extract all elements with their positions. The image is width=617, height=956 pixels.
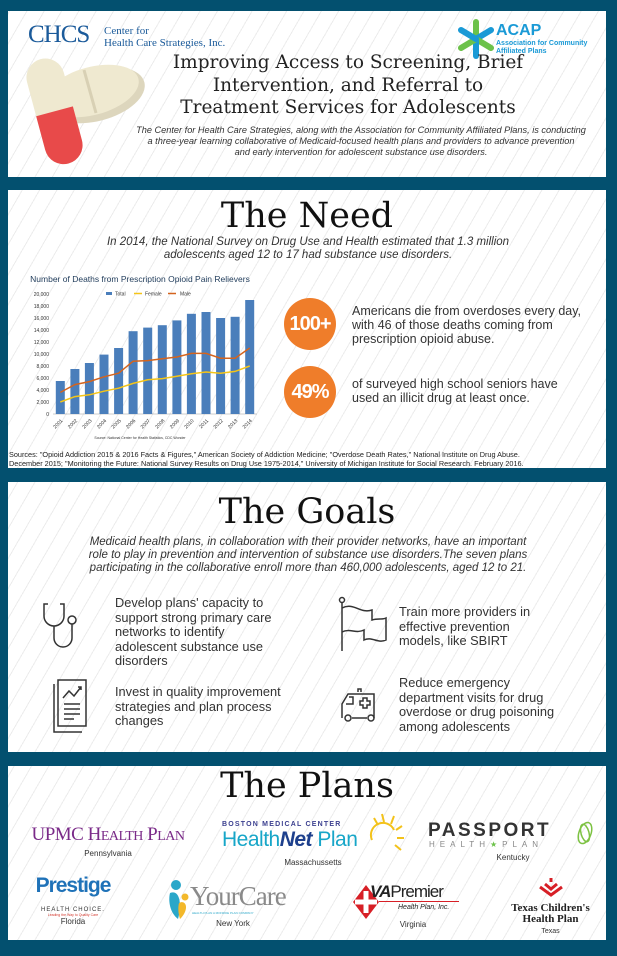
logo: UPMC: UPMC HEALTH PLAN: [31, 824, 185, 845]
goal: stethoscope: adolescent substance use: [115, 638, 263, 654]
icon: orange circle 49%: 49%: [291, 381, 329, 403]
goal: flag: [338, 596, 530, 651]
bar chart: opioid deaths: 16,000: [34, 316, 49, 322]
logo: ACAP: Affiliated Plans: [496, 48, 547, 55]
goal: flag: models, like SBIRT: [399, 633, 508, 648]
stat: 100+: Americans die from overdoses every day,: [352, 304, 581, 318]
bar chart: opioid deaths: Number of Deaths from Prescription Opioid Pain Relievers: [30, 274, 250, 284]
bar chart: opioid deaths: 18,000: [34, 304, 49, 310]
bar chart: opioid deaths: Total: [115, 292, 126, 298]
text: goals intro: role to play in prevention and intervention of substance use disorders.The seven plans: [89, 549, 527, 561]
goal: report: strategies and plan process: [115, 698, 272, 714]
icon: flag: [338, 596, 387, 651]
logo: YourCare: [169, 880, 286, 928]
logo: CHCS: [28, 21, 225, 49]
logo: Prestige Health Choice: Leading the Way to Quality Care: [48, 913, 98, 917]
goal: ambulance: overdose or drug poisoning: [399, 704, 554, 719]
sources: Sources: "Opioid Addiction 2015 & 2016 Facts & Figures," American Society of Addiction Medicine; "Overdose Death Rates," National Institute on Drug Abuse.: [9, 450, 520, 459]
bar chart: opioid deaths: 14,000: [34, 328, 49, 334]
intro text: [136, 125, 586, 157]
logo: Prestige Health Choice: Prestige: [36, 874, 110, 897]
bar chart: opioid deaths: 2001: [52, 418, 65, 430]
icon: orange circle 100+: 100+: [289, 313, 331, 335]
logo: CHCS: Center for: [104, 25, 149, 37]
sources: December 2015; "Monitoring the Future: National Survey Results on Drug Use 1975-2014," University of Michigan Institute for Social Research. February 2016.: [9, 458, 524, 468]
logo: ACAP: Association for Community: [496, 40, 587, 47]
goal: report: [53, 679, 281, 733]
logo: VA Premier: Virginia: [400, 920, 426, 929]
bar chart: opioid deaths: [30, 274, 257, 440]
bar chart: opioid deaths: 2013: [227, 418, 239, 430]
bar chart: opioid deaths: 0: [46, 412, 49, 418]
goal: ambulance: Reduce emergency: [399, 675, 510, 690]
logo: Texas Children's Health Plan: Texas: [541, 928, 560, 935]
icon: orange circle 100+: [284, 298, 336, 350]
bar chart: opioid deaths: 2011: [198, 418, 210, 430]
bar chart: opioid deaths: 2003: [81, 418, 94, 430]
logo: UPMC: Pennsylvania: [84, 849, 132, 858]
logo: UPMC: [31, 824, 185, 858]
logo: ACAP: ACAP: [496, 22, 541, 39]
bar chart: opioid deaths: Male: [180, 292, 191, 298]
logo: Boston Medical Center HealthNet Plan: HealthNet Plan: [222, 828, 357, 851]
goal: stethoscope: support strong primary care: [115, 610, 271, 624]
heading: The Goals: The Goals: [219, 492, 395, 532]
goal: ambulance: among adolescents: [399, 718, 510, 734]
logo: Texas Children's Health Plan: [511, 878, 590, 935]
goal: stethoscope: [43, 595, 271, 668]
goal: stethoscope: Develop plans' capacity to: [115, 595, 263, 610]
stat: 100+: with 46 of those deaths coming from: [352, 318, 553, 332]
logo: YourCare: New York: [216, 919, 250, 928]
bar chart: opioid deaths: 2004: [96, 418, 108, 430]
logo: Passport Health Plan: Kentucky: [497, 853, 529, 862]
logo: ACAP: [458, 19, 588, 59]
panel: the plans: [8, 766, 606, 940]
logo: Prestige Health Choice: Florida: [61, 917, 85, 926]
stat: 100+: [284, 298, 581, 350]
heading: The Plans: The Plans: [220, 766, 394, 806]
logo: CHCS: CHCS: [28, 21, 89, 48]
bar chart: opioid deaths: Female: [145, 292, 162, 298]
logo: Passport Health Plan: [428, 820, 593, 862]
stat: 100+: prescription opioid abuse.: [352, 332, 494, 346]
icon: orange circle 49%: [284, 366, 336, 418]
logo: Boston Medical Center HealthNet Plan: [222, 814, 404, 867]
logo: Passport Health Plan: HEALTH★PLAN: [429, 840, 543, 849]
stat: 49%: [284, 366, 558, 418]
goal: ambulance: department visits for drug: [399, 690, 543, 704]
logo: Boston Medical Center HealthNet Plan: Massachussetts: [284, 858, 342, 867]
bar chart: opioid deaths: 4,000: [36, 388, 49, 394]
logo: VA Premier: VAPremier: [370, 882, 443, 901]
bar chart: opioid deaths: 2008: [154, 418, 167, 430]
text: goals intro: participating in the collaborative enroll more than 460,000 adolescents, aged 12 to 21.: [90, 562, 526, 574]
text: goals intro: [89, 536, 527, 574]
logo: VA Premier: Health Plan, Inc.: [398, 904, 449, 911]
bar chart: opioid deaths: 2010: [183, 418, 196, 430]
logo: Prestige Health Choice: [36, 874, 111, 926]
intro text: and early intervention for adolescent substance use disorders.: [235, 147, 487, 157]
bar chart: opioid deaths: 2007: [140, 418, 152, 430]
bar chart: opioid deaths: 2009: [169, 418, 181, 430]
stat: 49%: of surveyed high school seniors have: [352, 377, 558, 391]
logo: Texas Children's Health Plan: Texas Children's: [511, 902, 590, 914]
goal: stethoscope: disorders: [115, 653, 168, 668]
title: Treatment Services for Adolescents: [180, 97, 516, 118]
bar chart: opioid deaths: 2012: [213, 418, 225, 430]
text: survey: In 2014, the National Survey on Drug Use and Health estimated that 1.3 million: [107, 236, 509, 248]
bar chart: opioid deaths: 2014: [242, 418, 254, 430]
logo: YourCare: HEALTH PLAN A MONROE PLAN COMPANY: [192, 911, 254, 915]
panel: header: [8, 11, 606, 177]
goal: flag: Train more providers in: [399, 604, 530, 619]
logo: Boston Medical Center HealthNet Plan: BOSTON MEDICAL CENTER: [222, 821, 341, 828]
bar chart: opioid deaths: 12,000: [34, 340, 49, 346]
title: [173, 52, 524, 118]
panel: the need: [8, 190, 606, 468]
logo: Prestige Health Choice: HEALTH CHOICE.: [41, 907, 105, 913]
heading: The Need: The Need: [221, 196, 393, 236]
bar chart: opioid deaths: 2002: [67, 418, 79, 430]
bar chart: opioid deaths: 2,000: [36, 400, 49, 406]
bar chart: opioid deaths: 6,000: [36, 376, 49, 382]
logo: YourCare: YourCare: [190, 881, 286, 911]
sources: [9, 450, 524, 468]
goal: report: changes: [115, 713, 163, 728]
logo: Passport Health Plan: PASSPORT: [428, 820, 551, 841]
text: survey: adolescents aged 12 to 17 had substance use disorders.: [164, 249, 452, 261]
bar chart: opioid deaths: 8,000: [36, 364, 49, 370]
logo: VA Premier: [353, 882, 459, 929]
goal: flag: effective prevention: [399, 618, 510, 634]
icon: ambulance: [341, 688, 375, 722]
title: Intervention, and Referral to: [213, 74, 483, 96]
goal: report: Invest in quality improvement: [115, 684, 281, 699]
text: goals intro: Medicaid health plans, in collaboration with their provider networks, have an important: [90, 536, 526, 548]
bar chart: opioid deaths: 20,000: [34, 292, 49, 298]
icon: stethoscope: [43, 603, 77, 648]
panel: the goals: [8, 482, 606, 752]
title: Improving Access to Screening, Brief: [173, 52, 523, 73]
icon: pills: [26, 58, 145, 164]
goal: ambulance: [341, 675, 554, 734]
bar chart: opioid deaths: 2005: [111, 418, 123, 430]
logo: Texas Children's Health Plan: Health Plan: [523, 913, 578, 925]
icon: chart document: [53, 679, 87, 733]
logo: CHCS: Health Care Strategies, Inc.: [104, 37, 225, 49]
intro text: The Center for Health Care Strategies, along with the Association for Community Affiliated Plans, is conducting: [136, 125, 586, 135]
stat: 49%: used an illicit drug at least once.: [352, 391, 530, 405]
text: survey: [107, 236, 509, 261]
intro text: a three-year learning collaborative of Medicaid-focused health plans and providers to advance prevention: [148, 136, 574, 146]
bar chart: opioid deaths: 10,000: [34, 352, 49, 358]
bar chart: opioid deaths: Source: National Center for Health Statistics, CDC Wonder: [94, 436, 186, 440]
goal: stethoscope: networks to identify: [115, 624, 225, 639]
bar chart: opioid deaths: 2006: [125, 418, 137, 430]
